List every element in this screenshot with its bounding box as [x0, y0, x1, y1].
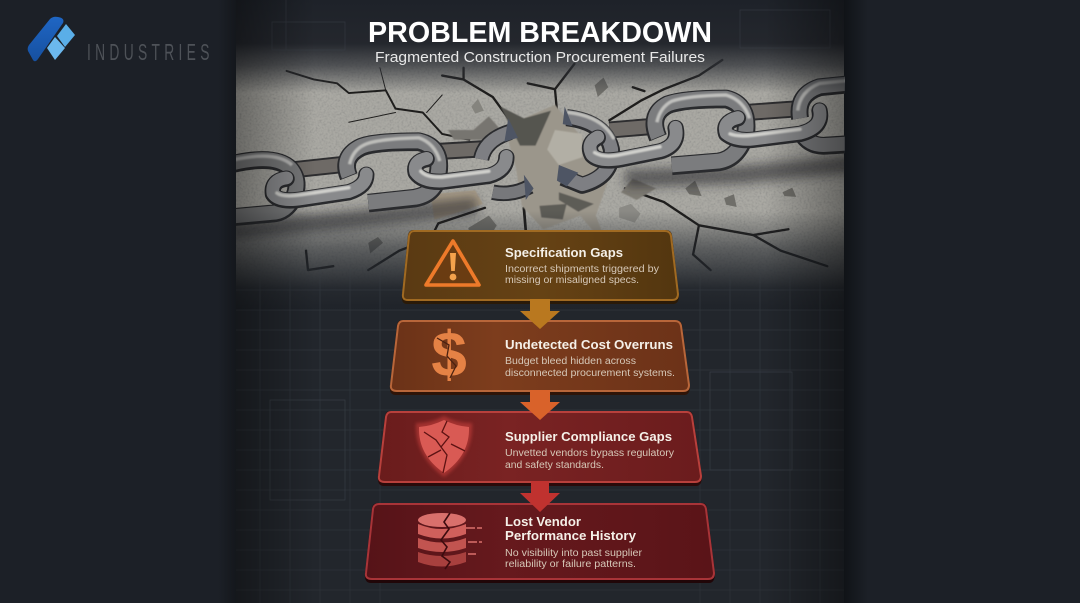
icon: cracked dollar sign: $	[431, 318, 467, 390]
text: specification gaps	[505, 245, 659, 286]
concrete cracks	[287, 60, 827, 270]
blueprint grid lines	[236, 255, 844, 603]
illustration: broken chain on cracked concrete	[228, 60, 858, 270]
panel: lost vendor performance history	[365, 503, 715, 583]
text: lost vendor performance history: No visibility into past supplier	[505, 548, 643, 559]
logo wordmark: INDUSTRIES	[87, 41, 214, 66]
broken link shards	[504, 107, 578, 200]
infographic canvas	[28, 0, 856, 603]
chain links behind	[228, 79, 858, 218]
text: lost vendor performance history: Performance History	[505, 528, 637, 543]
chain links in front	[273, 110, 820, 200]
arrow: compliance to history	[520, 481, 560, 512]
concrete slab	[236, 40, 844, 310]
panel: undetected cost overruns	[390, 318, 690, 395]
text: supplier compliance gaps: and safety standards.	[505, 460, 604, 471]
text: undetected cost overruns: disconnected procurement systems.	[505, 368, 675, 379]
text: specification gaps: Incorrect shipments triggered by	[505, 264, 659, 275]
chain shadow	[228, 163, 858, 231]
rubble crater	[432, 104, 656, 230]
subtitle: Fragmented Construction Procurement Failures	[375, 50, 705, 66]
logo mark	[28, 17, 75, 61]
text: supplier compliance gaps	[505, 429, 674, 471]
panel: backdrop with concrete	[236, 0, 844, 603]
rubble stones	[368, 78, 796, 253]
text: specification gaps: missing or misaligned specs.	[505, 275, 639, 286]
icon: cracked shield	[416, 416, 472, 477]
text: specification gaps: Specification Gaps	[505, 245, 623, 260]
upper faint blueprint	[272, 0, 830, 50]
fade overlay on concrete	[236, 0, 844, 310]
arrow: cost to compliance	[520, 390, 560, 420]
arrow: specification to cost	[520, 299, 560, 329]
text: lost vendor performance history: Lost Vendor	[505, 514, 581, 529]
logo	[28, 17, 214, 66]
text: supplier compliance gaps: Unvetted vendors bypass regulatory	[505, 448, 674, 459]
text: undetected cost overruns	[505, 337, 675, 379]
icon: cracked database	[418, 513, 482, 569]
text: supplier compliance gaps: Supplier Compliance Gaps	[505, 429, 672, 444]
text: undetected cost overruns: Budget bleed hidden across	[505, 356, 636, 367]
text: lost vendor performance history	[505, 514, 643, 570]
panel: supplier compliance gaps	[378, 411, 702, 486]
icon: warning triangle	[425, 240, 480, 286]
text: lost vendor performance history: reliability or failure patterns.	[505, 559, 636, 570]
title: PROBLEM BREAKDOWN	[368, 17, 712, 49]
chain back rods	[290, 109, 800, 170]
text: undetected cost overruns: Undetected Cost Overruns	[505, 337, 673, 352]
panel: specification gaps	[402, 230, 679, 304]
